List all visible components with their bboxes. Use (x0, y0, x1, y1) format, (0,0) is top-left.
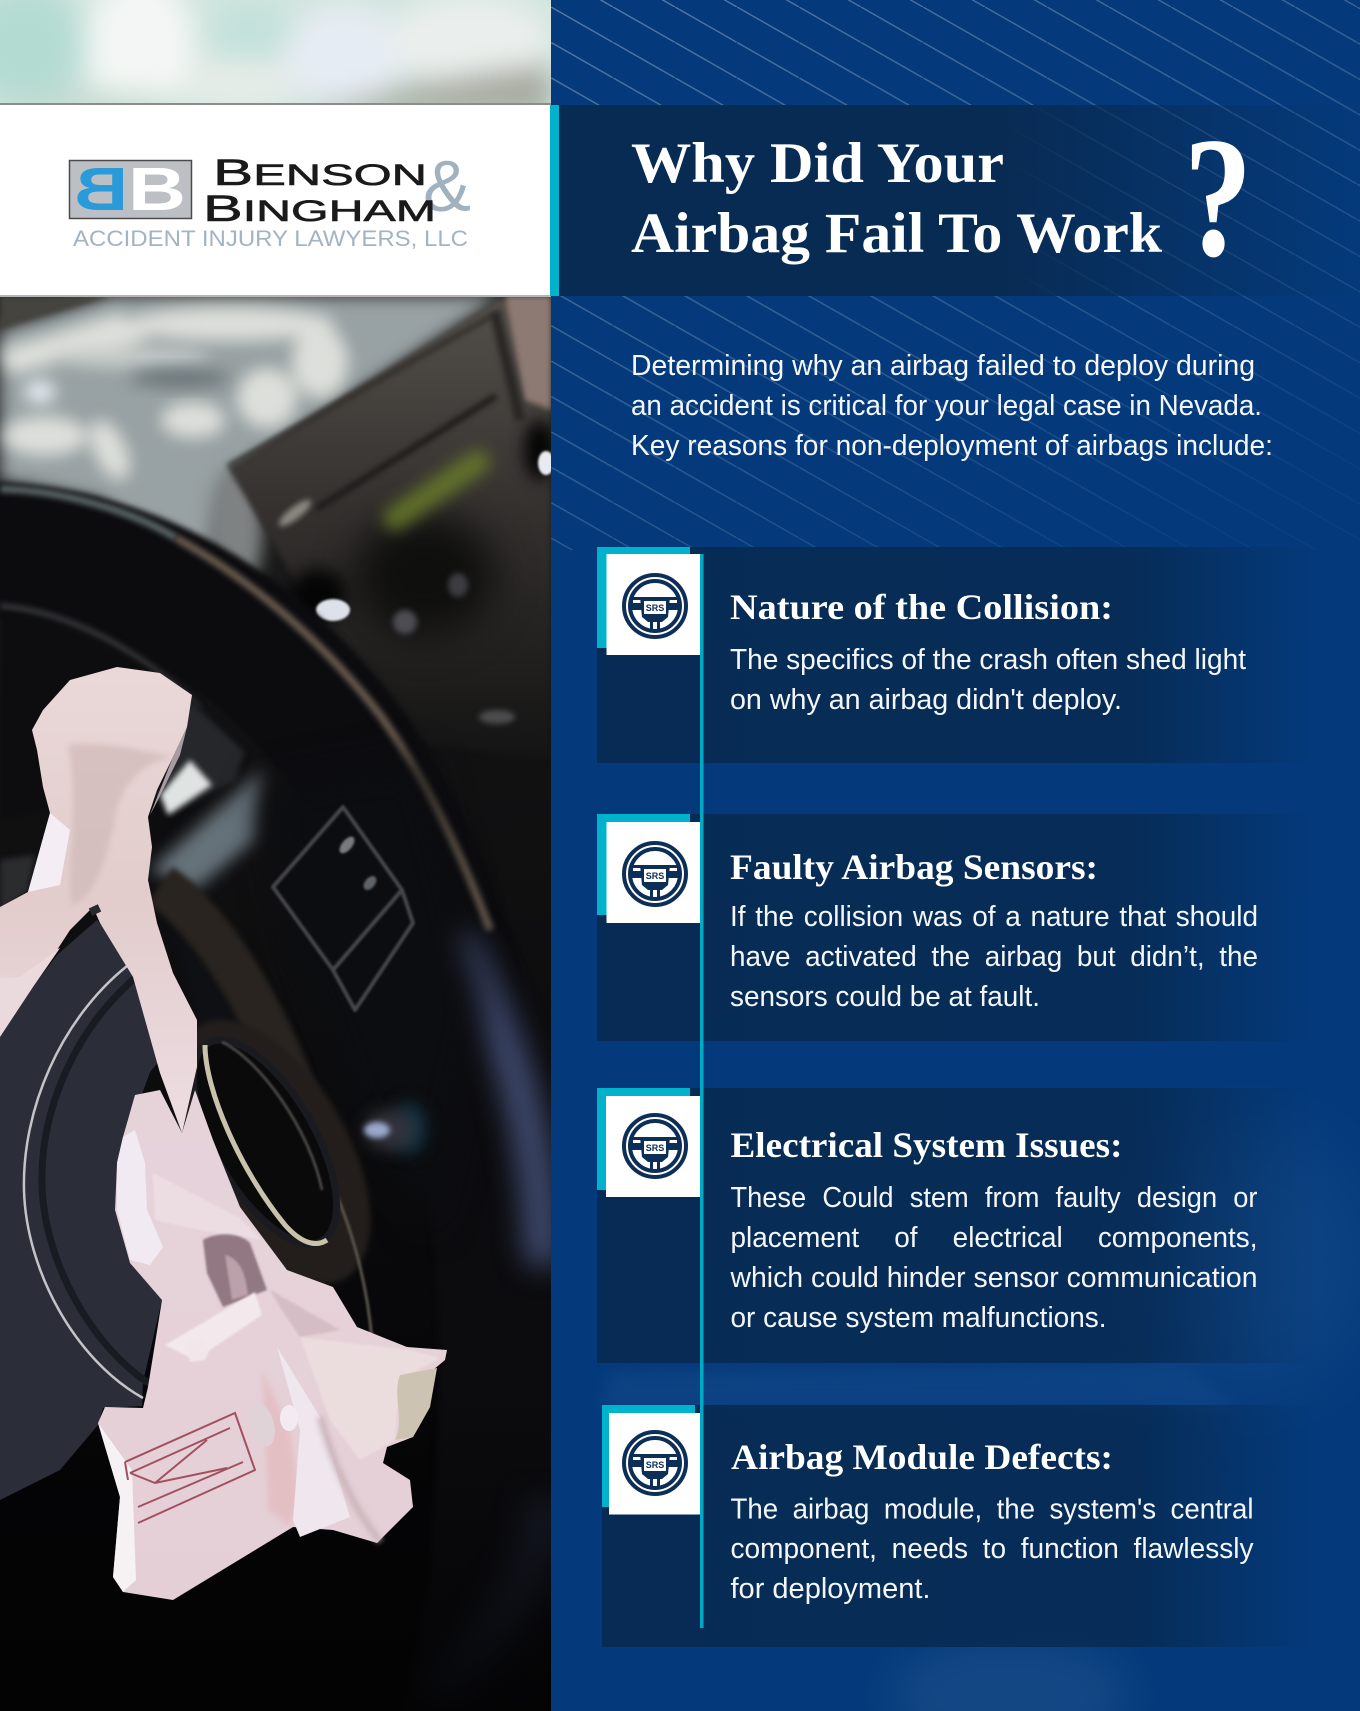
icon: steering wheel SRS: SRS (646, 1460, 664, 1470)
icon: steering wheel SRS (624, 1115, 686, 1177)
question mark: ? (1184, 102, 1252, 293)
description: or cause system malfunctions. (730, 1302, 1106, 1334)
red stitching on airbag (125, 1413, 255, 1523)
description (730, 644, 1246, 716)
photo: blurred window view at top (0, 0, 551, 103)
logo wordmark: B INGHAM (203, 188, 436, 229)
logo mark: B (128, 155, 186, 223)
description (730, 1494, 1254, 1605)
logo wordmark: ACCIDENT INJURY LAWYERS, LLC (73, 226, 468, 251)
chrome oval badge (177, 1020, 374, 1334)
lower fade to black (408, 1500, 551, 1711)
steering wheel rim (0, 489, 547, 1711)
description: have activated the airbag but didn’t, the (730, 941, 1258, 973)
intro text: Key reasons for non-deployment of airbags include: (631, 430, 1273, 462)
hub body (152, 742, 500, 1161)
icon: steering wheel SRS: SRS (646, 603, 664, 613)
heading: Electrical System Issues: (730, 1125, 1122, 1165)
leather airbag cover (0, 920, 177, 1500)
dashboard console (228, 296, 556, 760)
photo: deployed airbag on steering wheel (0, 296, 556, 1711)
description: The airbag module, the system's central (730, 1494, 1254, 1526)
description (730, 901, 1258, 1013)
description: for deployment. (730, 1573, 930, 1605)
heading: Nature of the Collision: (730, 587, 1113, 627)
description: If the collision was of a nature that should (730, 901, 1258, 933)
panel: right blue background (551, 0, 1360, 1711)
logo wordmark: B ENSON (213, 152, 427, 193)
intro text: an accident is critical for your legal case in Nevada. (631, 390, 1262, 422)
item 4: Airbag Module Defects (602, 1405, 1254, 1605)
description (730, 1182, 1258, 1334)
heading: Airbag Module Defects: (731, 1437, 1113, 1477)
icon: steering wheel SRS (624, 1432, 686, 1494)
icon: steering wheel SRS: SRS (646, 1143, 664, 1153)
item 2: Faulty Airbag Sensors (597, 814, 1258, 1013)
hub opening and dash light (0, 612, 262, 910)
description: component, needs to function flawlessly (730, 1533, 1254, 1565)
icon: steering wheel SRS (624, 575, 686, 637)
description: These Could stem from faulty design or (730, 1182, 1258, 1214)
title: Why Did Your (631, 132, 1004, 195)
windshield reflection (0, 296, 500, 595)
description: placement of electrical components, (730, 1222, 1258, 1254)
airbag fabric upper flap (0, 667, 197, 1133)
title banner (550, 102, 1360, 296)
timeline line (700, 554, 704, 1628)
intro text: Determining why an airbag failed to deploy during (631, 350, 1255, 382)
switch panel on wheel (273, 807, 413, 1010)
logo mark (70, 155, 192, 223)
icon: steering wheel SRS: SRS (646, 871, 664, 881)
item 1: Nature of the Collision (597, 547, 1246, 716)
logo mark: B (74, 155, 128, 223)
item 3: Electrical System Issues (597, 1088, 1258, 1334)
logo wordmark: & (423, 147, 471, 227)
logo wordmark (73, 147, 471, 251)
intro text (631, 350, 1273, 462)
description: sensors could be at fault. (730, 981, 1040, 1013)
title (631, 132, 1162, 265)
title: Airbag Fail To Work (631, 202, 1162, 265)
icon: steering wheel SRS (624, 843, 686, 905)
description: which could hinder sensor communication (730, 1262, 1258, 1294)
description: The specifics of the crash often shed light (730, 644, 1246, 676)
logo band (0, 103, 551, 297)
heading: Faulty Airbag Sensors: (730, 847, 1098, 887)
airbag fabric lower mass (98, 1090, 447, 1600)
item panel backgrounds (597, 547, 1317, 1647)
description: on why an airbag didn't deploy. (730, 684, 1122, 716)
